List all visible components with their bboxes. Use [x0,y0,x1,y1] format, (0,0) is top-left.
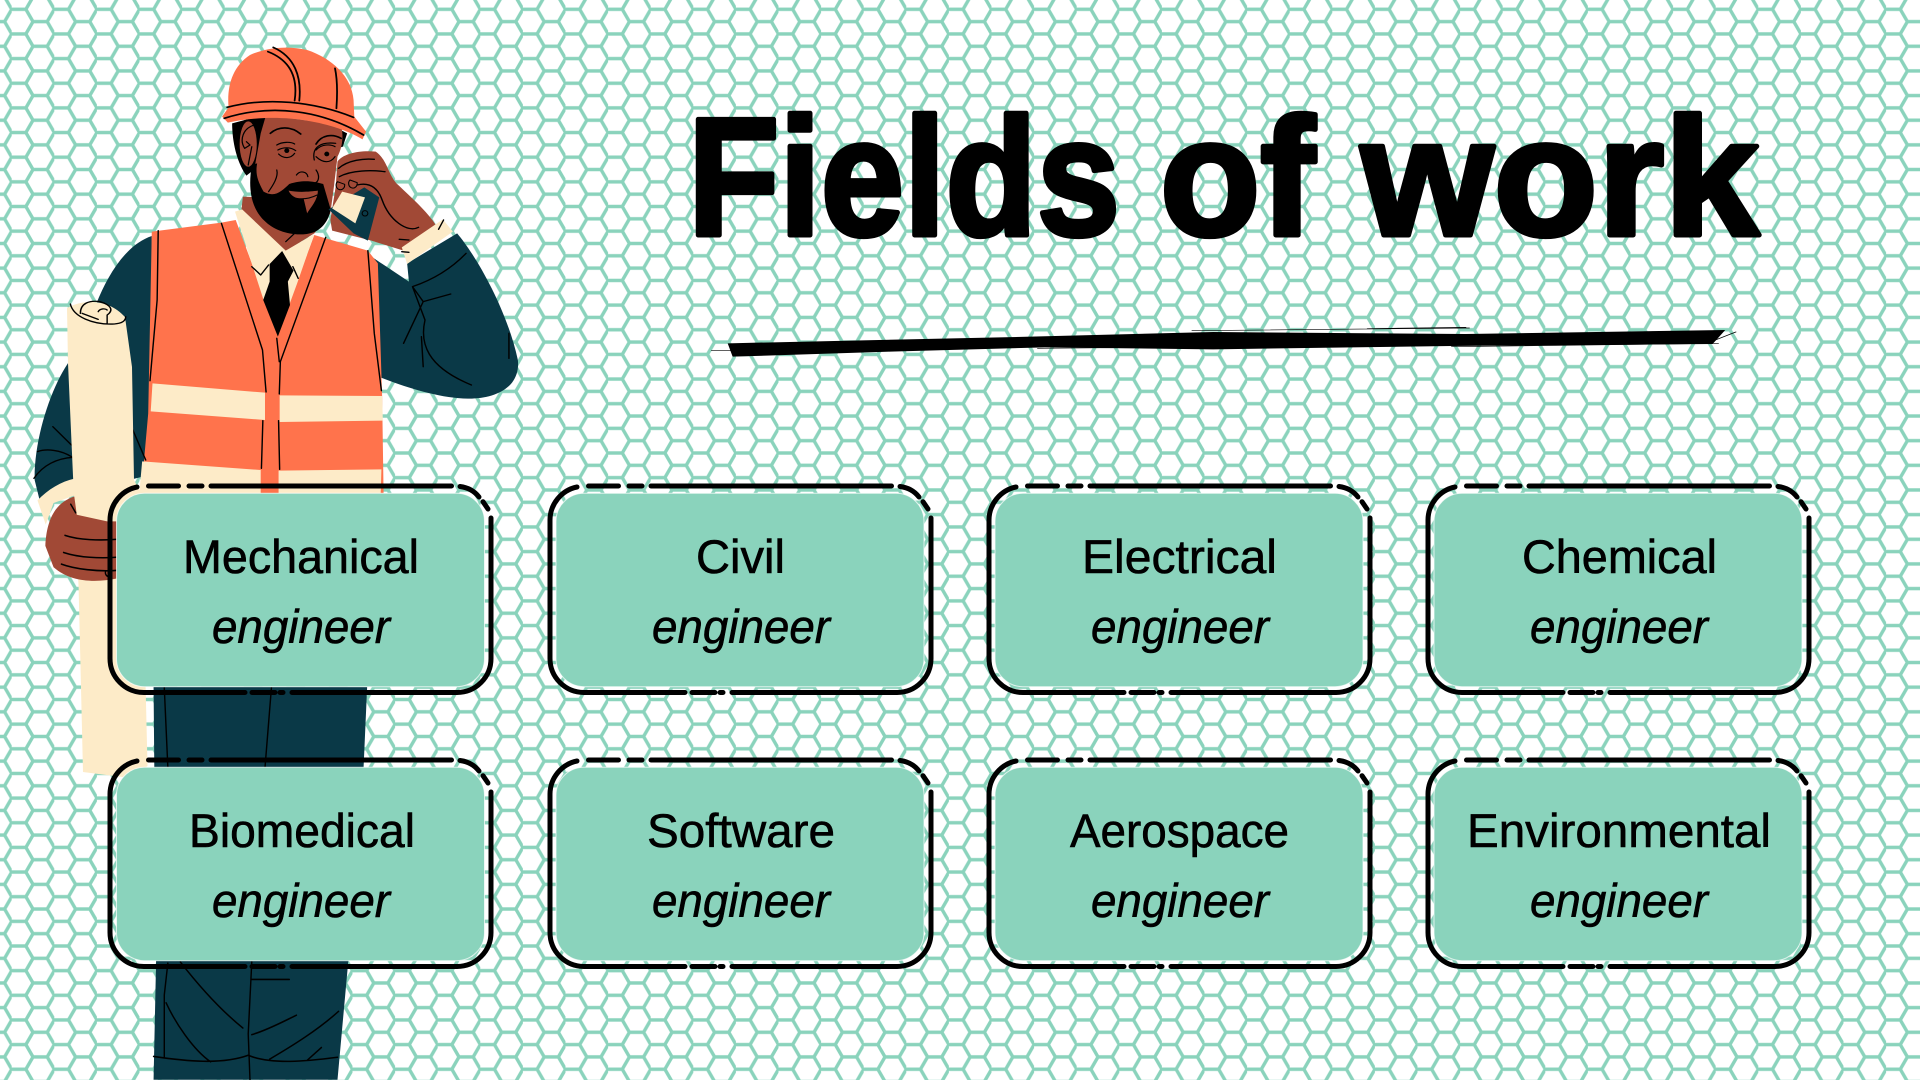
shirt cuff [37,479,80,524]
neck [241,197,332,253]
trouser seams [154,688,339,1080]
card: Mechanical engineer: engineer [212,600,392,653]
card: Mechanical engineer [110,486,491,692]
title [688,83,1760,271]
ear and hair [232,113,347,176]
card: Software engineer: Software [647,804,835,857]
trousers [154,687,367,1080]
title: of [1160,83,1316,271]
card: Software engineer: engineer [652,874,832,927]
hand holding phone [330,151,439,251]
card: Electrical engineer: engineer [1091,600,1271,653]
card: Chemical engineer: engineer [1530,600,1710,653]
card: Environmental engineer: engineer [1530,874,1710,927]
gripping hand [45,496,119,581]
card: Civil engineer [550,486,931,692]
card: Chemical engineer [1428,486,1809,692]
shoulder and lower arm [35,236,154,502]
blueprint roll [67,302,148,778]
card: Aerospace engineer: engineer [1091,874,1271,927]
illustration: engineer on the phone [34,47,518,1080]
card: Aerospace engineer: Aerospace [1070,804,1289,857]
safety vest [141,220,384,493]
card: Electrical engineer [989,486,1370,692]
card: Biomedical engineer: engineer [212,874,392,927]
card: Civil engineer: engineer [652,600,832,653]
fingers [336,180,357,190]
brush underline [712,327,1736,357]
vest seams [150,223,381,469]
card: Mechanical engineer: Mechanical [183,530,419,583]
shirt cuff [402,219,453,264]
sleeve folds [34,253,509,478]
lower body and hand [37,479,367,1080]
finger lines [61,504,118,577]
card: Environmental engineer [1428,760,1809,966]
tie [263,251,294,337]
face [252,115,342,233]
roll spiral [70,301,126,324]
card: Biomedical engineer: Biomedical [189,804,415,857]
eyes and brows [270,128,341,144]
card: Environmental engineer: Environmental [1467,804,1771,857]
card: Electrical engineer: Electrical [1082,530,1277,583]
card: Biomedical engineer [110,760,491,966]
title: work [1360,83,1760,271]
beard [250,163,330,234]
hard hat [222,48,366,139]
vest reflective stripes [139,383,383,493]
mouth and chin [289,191,318,213]
card: Chemical engineer: Chemical [1522,530,1717,583]
card: Civil engineer: Civil [696,530,785,583]
title: Fields [688,83,1120,271]
phone [329,187,379,241]
engineer upper body [34,47,518,502]
card: Software engineer [550,760,931,966]
raised arm sleeve [371,233,518,399]
card: Aerospace engineer [989,760,1370,966]
shirt collar [235,209,314,336]
